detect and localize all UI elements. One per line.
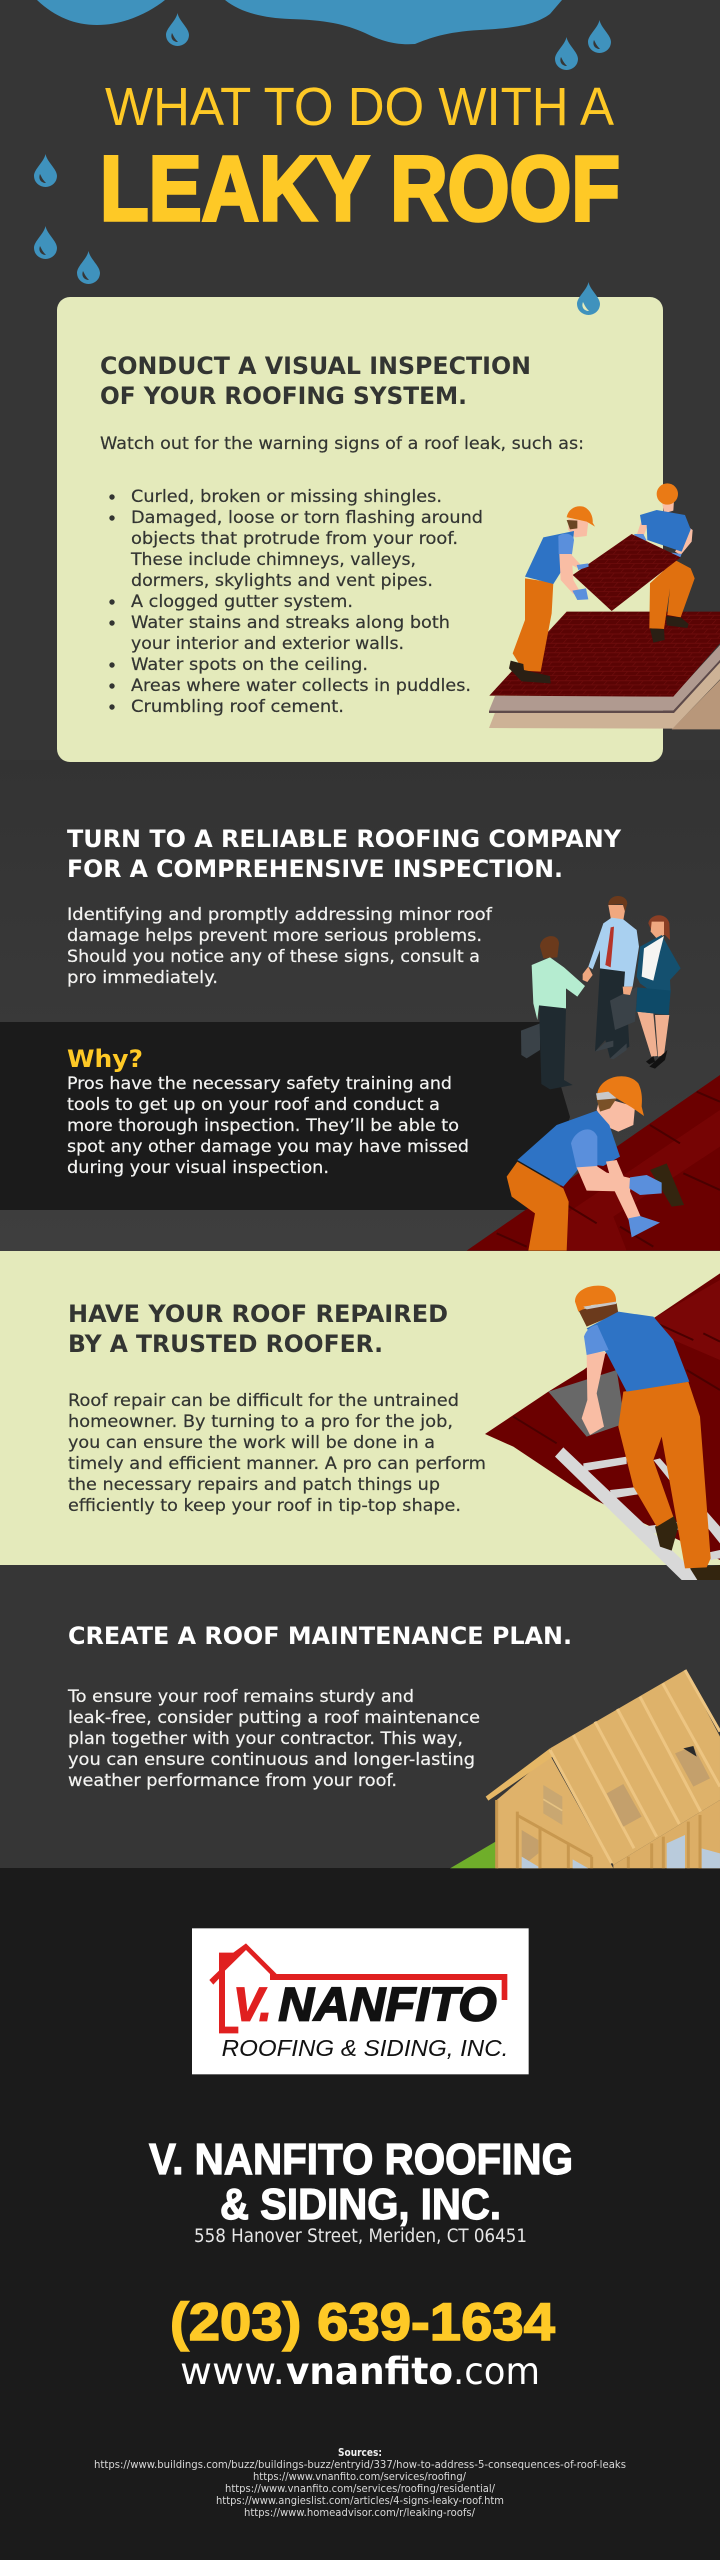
why body text: tools to get up on your roof and conduct a: [67, 1095, 440, 1115]
sources: [94, 2447, 626, 2519]
section 4 body text: leak-free, consider putting a roof maintenance: [68, 1708, 480, 1728]
section 3 body text: the necessary repairs and patch things up: [68, 1475, 440, 1495]
bullet list: Curled, broken or missing shingles.: [131, 487, 442, 507]
panel: visual inspection: [57, 297, 663, 762]
illustration: business people handshake and roofer: [467, 896, 720, 1251]
gray patch: [548, 1370, 625, 1437]
section 3 heading: BY A TRUSTED ROOFER.: [68, 1330, 383, 1358]
why body text: more thorough inspection. They’ll be able to: [67, 1116, 459, 1136]
section 3 body text: timely and efficient manner. A pro can perform: [68, 1454, 486, 1474]
heading: CONDUCT A VISUAL INSPECTION: [100, 352, 531, 380]
website: vnanfito: [286, 2350, 453, 2393]
title: LEAKY ROOF: [100, 138, 620, 240]
man with tie: [588, 896, 639, 1059]
ladder: [555, 1447, 720, 1580]
windows: [522, 1830, 538, 1861]
background: section 4: [0, 1565, 720, 1868]
walls: [497, 1755, 613, 1868]
lifted shingle panel: [573, 534, 681, 611]
website: .com: [453, 2350, 540, 2393]
bullet list: These include chimneys, valleys,: [130, 550, 416, 570]
phone number: (203) 639-1634: [170, 2293, 556, 2352]
company name: V. NANFITO ROOFING: [149, 2135, 573, 2184]
bullet list: your interior and exterior walls.: [131, 634, 404, 654]
background: section 3 light band: [0, 1251, 720, 1565]
man in mint shirt: [521, 936, 593, 1089]
left worker: [509, 506, 595, 683]
sources: https://www.angieslist.com/articles/4-signs-leaky-roof.htm: [216, 2495, 504, 2507]
roof: [550, 1670, 720, 1865]
sources: https://www.vnanfito.com/services/roofing/: [253, 2471, 466, 2483]
background: top section: [0, 0, 720, 780]
logo name: V.: [233, 1979, 272, 2032]
bullet list: Crumbling roof cement.: [131, 697, 344, 717]
bullet list: objects that protrude from your roof.: [131, 529, 458, 549]
why body text: Pros have the necessary safety training and: [67, 1074, 452, 1094]
bullet list: Water stains and streaks along both: [131, 613, 450, 633]
section 3 body text: you can ensure the work will be done in a: [68, 1433, 435, 1453]
sources: https://www.buildings.com/buzz/buildings-buzz/entryid/337/how-to-address-5-consequences-of-roof-leaks: [94, 2459, 626, 2471]
section 3 heading: HAVE YOUR ROOF REPAIRED: [68, 1300, 448, 1328]
bullet list: A clogged gutter system.: [131, 592, 353, 612]
grass: [450, 1840, 498, 1868]
section 3 body text: efficiently to keep your roof in tip-top shape.: [68, 1496, 461, 1516]
crouching roofer: [507, 1076, 684, 1251]
section 3 body text: homeowner. By turning to a pro for the job,: [68, 1412, 453, 1432]
section 2 body text: damage helps prevent more serious problems.: [67, 926, 482, 946]
section 4 body text: To ensure your roof remains sturdy and: [67, 1687, 414, 1707]
heading: OF YOUR ROOFING SYSTEM.: [100, 382, 467, 410]
section 2 body text: pro immediately.: [67, 968, 218, 988]
address: 558 Hanover Street, Meriden, CT 06451: [194, 2226, 527, 2247]
right worker: [634, 483, 695, 643]
company name: [149, 2135, 573, 2229]
section 4 body text: weather performance from your roof.: [68, 1771, 397, 1791]
background: why band: [0, 1022, 570, 1210]
section 4 body text: [67, 1687, 480, 1791]
woman: [636, 915, 681, 1069]
logo tagline: ROOFING & SIDING, INC.: [222, 2035, 508, 2061]
section 2 body text: Should you notice any of these signs, consult a: [67, 947, 480, 967]
sources: Sources:: [338, 2447, 382, 2459]
website: [180, 2350, 540, 2393]
section 2 heading: FOR A COMPREHENSIVE INSPECTION.: [67, 855, 563, 883]
section 4 body text: plan together with your contractor. This way,: [68, 1729, 463, 1749]
section 2 heading: [67, 825, 622, 883]
water puddles at top: [37, 0, 562, 44]
why heading: Why?: [67, 1045, 143, 1073]
section 3 heading: [68, 1300, 448, 1358]
bullet list: Damaged, loose or torn flashing around: [131, 508, 483, 528]
title: WHAT TO DO WITH A: [105, 77, 614, 137]
logo house outline: [209, 1943, 507, 2033]
illustration: wooden house frame: [450, 1670, 720, 1868]
section 4 body text: you can ensure continuous and longer-lasting: [68, 1750, 475, 1770]
background: section 2: [0, 760, 720, 1251]
why body text: [67, 1074, 469, 1178]
background: footer: [0, 1868, 720, 2560]
section 2 heading: TURN TO A RELIABLE ROOFING COMPANY: [67, 825, 622, 853]
logo background: [192, 1928, 529, 2074]
bullet list: [109, 487, 483, 717]
bullet list: Water spots on the ceiling.: [131, 655, 368, 675]
panel background: [57, 297, 663, 762]
illustration: roofer climbing ladder: [485, 1273, 720, 1580]
water drops: [34, 13, 611, 284]
logo name: NANFITO: [278, 1979, 497, 2032]
why body text: during your visual inspection.: [67, 1158, 329, 1178]
website: www.: [180, 2350, 285, 2393]
roofer: [575, 1286, 720, 1580]
section 4 heading: CREATE A ROOF MAINTENANCE PLAN.: [68, 1622, 572, 1650]
title: [100, 77, 620, 240]
heading: [100, 352, 531, 410]
why body text: spot any other damage you may have missed: [67, 1137, 469, 1157]
roof: [467, 1075, 720, 1251]
bullet list: Areas where water collects in puddles.: [131, 676, 471, 696]
section 2 body text: [67, 905, 493, 988]
company logo: [192, 1928, 529, 2074]
company name: & SIDING, INC.: [220, 2180, 501, 2229]
illustration: two roofers installing shingle panel: [489, 483, 720, 729]
section 3 body text: [68, 1391, 486, 1516]
sources: https://www.homeadvisor.com/r/leaking-roofs/: [244, 2507, 475, 2519]
intro text: Watch out for the warning signs of a roof leak, such as:: [100, 434, 584, 454]
water drop on panel: [577, 282, 600, 315]
roof: [485, 1273, 720, 1560]
section 2 body text: Identifying and promptly addressing minor roof: [67, 905, 493, 925]
section 3 body text: Roof repair can be difficult for the untrained: [68, 1391, 459, 1411]
sources: https://www.vnanfito.com/services/roofing/residential/: [225, 2483, 495, 2495]
bullet list: dormers, skylights and vent pipes.: [131, 571, 433, 591]
